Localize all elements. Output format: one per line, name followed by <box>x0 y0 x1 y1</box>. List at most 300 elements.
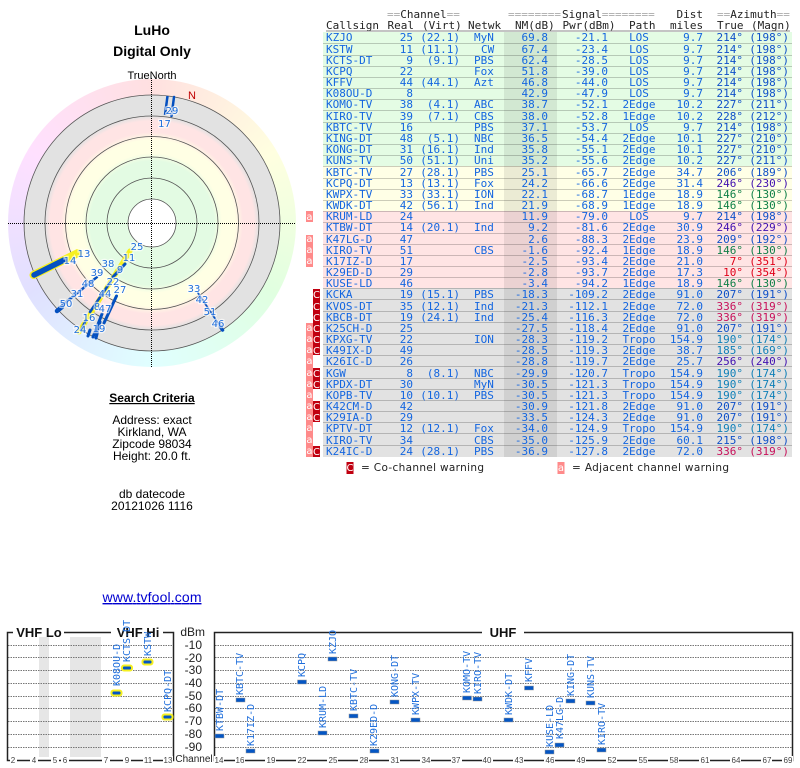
channel number labels: 24 <box>74 325 86 336</box>
station table rows: -3.4 <box>522 277 548 290</box>
station table rows: 30.9 <box>676 221 703 234</box>
station table rows: 38.7 <box>676 344 703 357</box>
station table rows: (13.1) <box>420 177 460 190</box>
channel ticks: 69 <box>784 756 793 765</box>
station table rows: 24 <box>400 445 413 458</box>
station table rows: Azt <box>474 76 494 89</box>
station table rows: (174°) <box>749 389 789 402</box>
station table rows: -29.9 <box>515 367 548 380</box>
table row backgrounds <box>323 32 792 457</box>
channel number labels: 31 <box>71 289 83 300</box>
station table rows: 44 <box>400 76 413 89</box>
station table rows: -53.7 <box>575 121 608 134</box>
station table rows: 29 <box>400 411 413 424</box>
station table rows: 2Edge <box>622 445 656 458</box>
station table rows: 91.0 <box>676 322 703 335</box>
station table rows: 2Edge <box>622 355 656 368</box>
station table rows: 17 <box>400 255 413 268</box>
channel number labels: 14 <box>64 256 76 267</box>
channel ticks: 31 <box>391 756 400 765</box>
station table rows: ION <box>474 333 494 346</box>
station table rows: K29IA-D <box>326 411 372 424</box>
station table rows: 17.3 <box>676 266 703 279</box>
station table rows: -93.4 <box>575 255 608 268</box>
channel ticks: 58 <box>670 756 679 765</box>
station table rows: -120.7 <box>568 367 608 380</box>
table header: Path <box>629 19 656 32</box>
table header: True <box>717 19 744 32</box>
station table rows: PBS <box>474 121 494 134</box>
station table rows: NBC <box>474 367 494 380</box>
UHF stations: K47LG-D <box>555 697 566 739</box>
station table rows: -36.9 <box>515 445 548 458</box>
station table rows: K24IC-D <box>326 445 372 458</box>
channel ticks: 19 <box>267 756 276 765</box>
station table rows: 190° <box>716 333 743 346</box>
search criteria: 20121026 1116 <box>111 499 193 513</box>
station table rows: 2Edge <box>622 132 656 145</box>
station table rows: 69.8 <box>522 31 548 44</box>
channel number labels: 38 <box>102 259 114 270</box>
adjacent channel warning flags: a <box>306 401 313 412</box>
channel ticks: 61 <box>701 756 710 765</box>
UHF stations: KIRO-TV <box>597 703 608 745</box>
co-channel warning flags: C <box>313 346 320 357</box>
station table rows: KPTV-DT <box>326 422 373 435</box>
station table rows: -34.0 <box>515 422 548 435</box>
station table rows: (191°) <box>749 411 789 424</box>
station table rows: PBS <box>474 288 494 301</box>
VHF stations: KCTS-DT <box>122 620 133 662</box>
station table rows: 48 <box>400 132 413 145</box>
station table rows: (198°) <box>749 121 789 134</box>
spectrum chart: VHF panel <box>8 620 174 760</box>
channel number labels: 48 <box>82 279 94 290</box>
station table rows: -30.5 <box>515 378 548 391</box>
station table rows: 9.7 <box>683 76 703 89</box>
station table rows: (212°) <box>749 110 789 123</box>
co-channel warning flags: C <box>313 402 320 413</box>
station table rows: PBS <box>474 166 494 179</box>
station table rows: KUNS-TV <box>326 154 373 167</box>
station table rows: 18.9 <box>676 244 703 257</box>
station table rows: (33.1) <box>420 188 460 201</box>
station table rows: 1Edge <box>622 110 656 123</box>
station sticks: southwest highlighted <box>34 251 130 332</box>
station table rows: KIRO-TV <box>326 110 373 123</box>
station table rows: CW <box>481 43 495 56</box>
adjacent channel warning flags: a <box>306 446 313 457</box>
station table rows: 31.4 <box>676 177 703 190</box>
station table rows: 16 <box>400 121 413 134</box>
station table rows: 51.8 <box>522 65 548 78</box>
station table rows: -55.6 <box>575 154 608 167</box>
station table rows: 50 <box>400 154 413 167</box>
station table rows: 72.0 <box>676 445 703 458</box>
station table rows: 18.9 <box>676 188 703 201</box>
polar chart background: compass hue ring <box>8 79 296 367</box>
adjacent channel warning flags: a <box>306 256 313 267</box>
station table rows: 1Edge <box>622 199 656 212</box>
station table rows: 2Edge <box>622 266 656 279</box>
range rings <box>24 95 280 351</box>
station table rows: MyN <box>474 31 494 44</box>
station table rows: 207° <box>716 288 743 301</box>
legend: co-channel: C <box>347 463 354 474</box>
station table rows: (198°) <box>749 434 789 447</box>
station table rows: 154.9 <box>670 422 703 435</box>
station table rows: 146° <box>716 244 743 257</box>
station table rows: 29 <box>400 266 413 279</box>
table header: Callsign <box>326 19 379 32</box>
station table rows: 246° <box>716 177 743 190</box>
station table rows: -66.6 <box>575 177 608 190</box>
station table rows: 36.5 <box>522 132 548 145</box>
table header: Pwr(dBm) <box>562 19 615 32</box>
channel ticks: 7 <box>104 756 109 765</box>
channel ticks: 37 <box>452 756 461 765</box>
channel number labels: 44 <box>99 289 111 300</box>
station table rows: -47.9 <box>575 87 608 100</box>
channel number labels: 27 <box>114 285 126 296</box>
station table rows: 190° <box>716 422 743 435</box>
station table rows: PBS <box>474 445 494 458</box>
station table rows: (351°) <box>749 255 789 268</box>
table header: Channel== <box>400 8 460 21</box>
station table rows: KIRO-TV <box>326 434 373 447</box>
UHF stations: KING-DT <box>566 654 577 696</box>
station table rows: LOS <box>629 87 649 100</box>
station table rows: PBS <box>474 54 494 67</box>
search criteria: db datecode <box>119 487 185 501</box>
station table rows: 1Edge <box>622 244 656 257</box>
station table rows: KCTS-DT <box>326 54 373 67</box>
station table rows: KCPQ-DT <box>326 177 373 190</box>
adjacent channel warning flags: a <box>306 334 313 345</box>
channel ticks: 55 <box>639 756 648 765</box>
table header: == <box>717 8 731 21</box>
station table rows: -55.1 <box>575 143 608 156</box>
station table rows: 2Edge <box>622 221 656 234</box>
magnetic north marker: N <box>188 90 196 102</box>
table header: == <box>387 8 401 21</box>
station table rows: -88.3 <box>575 233 608 246</box>
station sticks: southeast <box>198 293 222 330</box>
station table rows: 9.7 <box>683 43 703 56</box>
VHF stations: K08OU-D <box>112 644 123 686</box>
station table rows: 91.0 <box>676 400 703 413</box>
co-channel warning flags: C <box>313 335 320 346</box>
station table rows: Ind <box>474 221 494 234</box>
station table rows: 38 <box>400 98 413 111</box>
station table rows: 51 <box>400 244 413 257</box>
table header: (Virt) <box>422 19 462 32</box>
station table rows: (12.1) <box>420 300 460 313</box>
table header: Signal <box>562 8 602 21</box>
channel number labels <box>60 106 224 336</box>
station table rows: 2Edge <box>622 143 656 156</box>
station table rows: (198°) <box>749 65 789 78</box>
station table rows: (211°) <box>749 154 789 167</box>
station table rows: 25.1 <box>522 166 548 179</box>
channel number labels: 17 <box>158 119 171 130</box>
station table rows: -109.2 <box>568 288 608 301</box>
station table rows: 336° <box>716 311 743 324</box>
dBm axis: -60 <box>185 701 202 715</box>
station table rows: 227° <box>716 154 743 167</box>
station table rows: K26IC-D <box>326 355 372 368</box>
station table rows: KPXG-TV <box>326 333 373 346</box>
station table rows: LOS <box>629 54 649 67</box>
channel number labels: 13 <box>78 249 90 260</box>
station table rows: -28.3 <box>515 333 548 346</box>
station table rows: 206° <box>716 166 743 179</box>
station table rows: 47 <box>400 233 413 246</box>
legend: adjacent: a <box>558 463 564 474</box>
station table rows: K25CH-D <box>326 322 372 335</box>
station table rows <box>326 31 789 458</box>
search criteria <box>109 391 195 513</box>
station table rows: KING-DT <box>326 132 373 145</box>
channel ticks <box>10 756 793 765</box>
channel ticks: 67 <box>763 756 772 765</box>
UHF stations: KUNS-TV <box>586 656 597 698</box>
UHF stations: KFFV <box>524 658 535 682</box>
station table rows: 9.2 <box>528 221 548 234</box>
channel ticks: 22 <box>298 756 307 765</box>
dBm axis: -50 <box>185 689 202 703</box>
station table rows: (319°) <box>749 311 789 324</box>
co-channel warning flags: C <box>313 380 320 391</box>
station table rows: KOPB-TV <box>326 389 373 402</box>
station table rows: Tropo <box>622 389 656 402</box>
station table rows: KBTC-TV <box>326 121 373 134</box>
channel number labels: 25 <box>131 242 143 253</box>
co-channel warning flags: C <box>313 290 320 301</box>
station table rows: 215° <box>716 434 743 447</box>
station table rows: 256° <box>716 355 743 368</box>
adjacent channel warning flags: a <box>306 412 313 423</box>
station table rows: (198°) <box>749 210 789 223</box>
station table rows: 10.1 <box>676 132 703 145</box>
station table rows: (211°) <box>749 98 789 111</box>
dBm axis: -30 <box>185 663 202 677</box>
station table rows: (198°) <box>749 54 789 67</box>
station table rows: -81.6 <box>575 221 608 234</box>
station table rows: KOMO-TV <box>326 98 373 111</box>
station table rows: -2.5 <box>522 255 548 268</box>
station table rows: Fox <box>474 65 494 78</box>
station table rows: (28.1) <box>420 166 460 179</box>
station table rows: 214° <box>716 121 743 134</box>
station table rows: 24.2 <box>522 177 548 190</box>
station table rows: 10.2 <box>676 98 703 111</box>
spectrum chart: VHF panel: VHF Hi <box>117 625 159 640</box>
dBm axis: -40 <box>185 676 202 690</box>
station table rows: -93.7 <box>575 266 608 279</box>
station table rows: -44.0 <box>575 76 608 89</box>
station table rows: 46.8 <box>522 76 548 89</box>
station table rows: (130°) <box>749 199 789 212</box>
spectrum chart: UHF panel: UHF <box>490 625 516 640</box>
station table rows: -30.9 <box>515 400 548 413</box>
station table rows: (198°) <box>749 76 789 89</box>
station table rows: Ind <box>474 300 494 313</box>
station table rows: 25 <box>400 31 413 44</box>
station table rows: 18.9 <box>676 199 703 212</box>
co-channel warning flags <box>313 289 320 458</box>
station table rows: 38.0 <box>522 110 548 123</box>
station table rows: -23.4 <box>575 43 608 56</box>
station table rows: 2Edge <box>622 166 656 179</box>
station table rows: (191°) <box>749 288 789 301</box>
station table rows: -21.3 <box>515 300 548 313</box>
station table rows: KCPQ <box>326 65 352 78</box>
station table rows: -119.3 <box>568 344 608 357</box>
station table rows: 1Edge <box>622 277 656 290</box>
channel ticks: 46 <box>546 756 555 765</box>
table header: Real <box>388 19 414 32</box>
station table rows: KWPX-TV <box>326 188 373 201</box>
station table rows: 2Edge <box>622 344 656 357</box>
station table rows: 13 <box>400 177 413 190</box>
station table rows: 9 <box>406 54 413 67</box>
station table rows: LOS <box>629 76 649 89</box>
station table rows: 214° <box>716 76 743 89</box>
station table rows: 2Edge <box>622 98 656 111</box>
station table rows: Ind <box>474 199 494 212</box>
station table rows: 67.4 <box>522 43 548 56</box>
station table rows: 31 <box>400 143 413 156</box>
station table rows: 7° <box>730 255 743 268</box>
co-channel warning flags: C <box>313 447 320 458</box>
station table rows: (130°) <box>749 277 789 290</box>
station table rows: 227° <box>716 132 743 145</box>
VHF stations <box>112 620 174 720</box>
station table rows: KFFV <box>326 76 353 89</box>
station table rows: (198°) <box>749 43 789 56</box>
station table rows: -25.4 <box>515 311 548 324</box>
station table rows: 214° <box>716 43 743 56</box>
station table rows: 42.9 <box>522 87 548 100</box>
station table rows: 33 <box>400 188 413 201</box>
station table rows: -52.8 <box>575 110 608 123</box>
station table rows: 11.9 <box>522 210 548 223</box>
station table rows: 190° <box>716 389 743 402</box>
station table rows: 2Edge <box>622 177 656 190</box>
polar chart <box>8 70 296 367</box>
station table rows: 9.7 <box>683 210 703 223</box>
station table rows: 207° <box>716 322 743 335</box>
station sticks: north <box>165 96 174 116</box>
UHF stations: KBTC-TV <box>349 669 360 711</box>
spectrum chart: VHF panel: VHF Lo <box>16 625 62 640</box>
legend: co-channel: = Co-channel warning <box>361 462 484 474</box>
channel ticks: 40 <box>483 756 492 765</box>
station table rows: (28.1) <box>420 445 460 458</box>
station table rows: 18.9 <box>676 277 703 290</box>
channel ticks: 49 <box>577 756 586 765</box>
station table rows: -27.5 <box>515 322 548 335</box>
station table rows: (191°) <box>749 322 789 335</box>
table header: (Magn) <box>751 19 791 32</box>
station table rows: KVOS-DT <box>326 300 373 313</box>
channel ticks: 16 <box>236 756 245 765</box>
search criteria: Zipcode 98034 <box>112 437 192 451</box>
station table rows: Fox <box>474 422 494 435</box>
station table rows: 38.7 <box>522 98 548 111</box>
station table rows: (210°) <box>749 132 789 145</box>
station table rows: 12 <box>400 422 413 435</box>
adjacent channel warning flags: a <box>306 212 313 223</box>
station table rows: Uni <box>474 154 494 167</box>
station table rows: (319°) <box>749 300 789 313</box>
station table rows: 22.1 <box>522 188 548 201</box>
station table rows: (24.1) <box>420 311 460 324</box>
station table rows: -116.3 <box>568 311 608 324</box>
station table rows: KUSE-LD <box>326 277 372 290</box>
channel ticks: 43 <box>515 756 524 765</box>
station table rows: 42 <box>400 400 413 413</box>
station table rows: LOS <box>629 121 649 134</box>
station table rows: -112.1 <box>568 300 608 313</box>
station table rows: CBS <box>474 434 494 447</box>
station table rows: -121.3 <box>568 389 608 402</box>
station table rows: 34 <box>400 434 413 447</box>
UHF stations: KWPX-TV <box>411 673 422 715</box>
channel ticks: 14 <box>215 756 224 765</box>
dBm axis: Channel <box>175 754 213 765</box>
channel number labels: 22 <box>107 277 119 288</box>
title <box>113 22 191 59</box>
station table rows: -54.4 <box>575 132 608 145</box>
station table rows: 21.0 <box>676 255 703 268</box>
station table rows: K49IX-D <box>326 344 372 357</box>
station table rows: K17IZ-D <box>326 255 372 268</box>
station table rows: (191°) <box>749 400 789 413</box>
station table rows: 39 <box>400 110 413 123</box>
dBm axis: dBm <box>180 625 205 639</box>
station table rows: 35.2 <box>522 154 548 167</box>
station table rows: 24 <box>400 210 413 223</box>
station table rows: 190° <box>716 378 743 391</box>
station table rows: 207° <box>716 411 743 424</box>
dBm axis <box>175 625 213 765</box>
UHF stations: KWDK-DT <box>504 673 515 715</box>
UHF stations: KRUM-LD <box>318 686 329 728</box>
station table rows: 154.9 <box>670 333 703 346</box>
station table rows: Tropo <box>622 333 656 346</box>
station table rows: KBCB-DT <box>326 311 373 324</box>
dBm axis: -70 <box>185 714 202 728</box>
channel ticks: 5 <box>53 756 58 765</box>
station table rows: -92.4 <box>575 244 608 257</box>
station table rows: -28.8 <box>515 355 548 368</box>
UHF stations: KBTC-TV <box>235 653 246 695</box>
station table rows: K08OU-D <box>326 87 372 100</box>
station table rows: 10 <box>400 389 413 402</box>
station table rows: -18.3 <box>515 288 548 301</box>
station table rows: -119.2 <box>568 333 608 346</box>
station table rows: 2Edge <box>622 322 656 335</box>
co-channel warning flags: C <box>313 369 320 380</box>
station table rows: -28.5 <box>575 54 608 67</box>
station table rows: (198°) <box>749 31 789 44</box>
station table rows: 185° <box>716 344 743 357</box>
station table rows: 21.9 <box>522 199 548 212</box>
station table rows: -127.8 <box>568 445 608 458</box>
channel number labels: 47 <box>99 304 111 315</box>
